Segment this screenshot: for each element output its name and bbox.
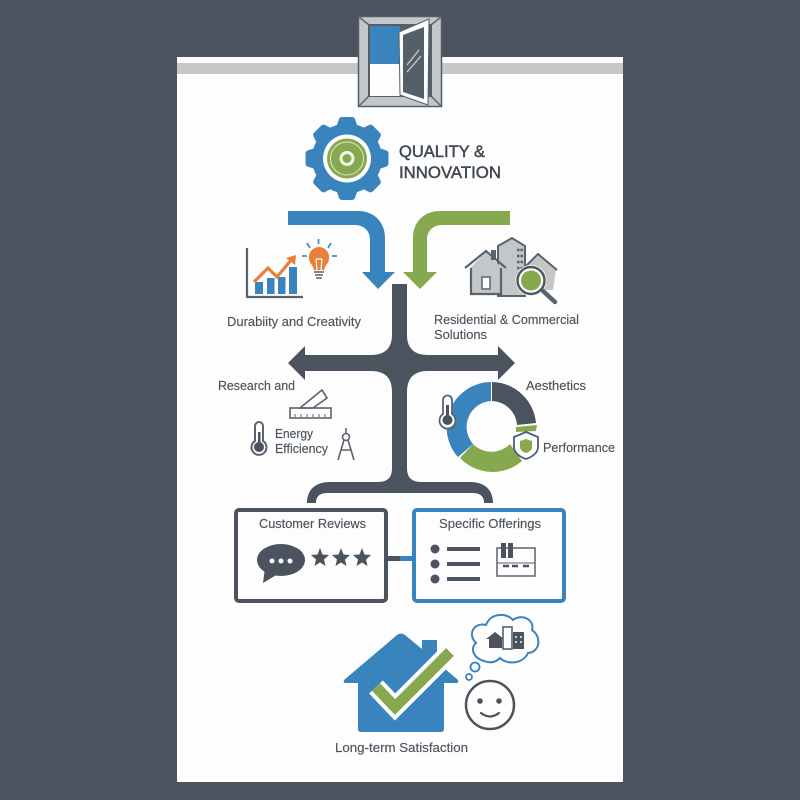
label: durability: Durabiity and Creativity — [227, 315, 362, 329]
arrow: blue down — [288, 211, 395, 289]
icon: list — [430, 544, 480, 584]
icon: thermometer right — [440, 396, 455, 429]
label: residential and commercial: Residential & Commercial — [434, 313, 579, 327]
icon: thermometer left — [252, 422, 266, 455]
label: research and: Research and — [218, 379, 295, 393]
icon: growth chart — [247, 248, 303, 297]
icon: thought bubble — [466, 615, 538, 680]
icon: open window — [358, 16, 442, 106]
label: energy efficiency: Efficiency — [275, 442, 329, 456]
label: aesthetics: Aesthetics — [526, 379, 586, 393]
label: long-term satisfaction: Long-term Satisfaction — [335, 741, 468, 755]
label: energy efficiency — [275, 427, 329, 456]
icon: house with check — [344, 634, 458, 732]
label: specific offerings: Specific Offerings — [439, 517, 541, 531]
label: customer reviews: Customer Reviews — [259, 517, 366, 531]
icon: houses and magnifier — [465, 238, 557, 302]
arrow: green down — [403, 211, 510, 289]
icon: speech bubble — [257, 544, 305, 583]
icon: light bulb — [302, 239, 337, 278]
label: performance: Performance — [543, 441, 615, 455]
icon: drafting compass — [338, 428, 354, 460]
title: QUALITY & — [399, 143, 485, 161]
title: INNOVATION — [399, 164, 501, 182]
panel: customer reviews — [236, 510, 386, 601]
label: residential and commercial: Solutions — [434, 328, 487, 342]
chart: donut — [447, 382, 537, 472]
panel: paper sheet — [177, 57, 623, 782]
icon: smiley face — [466, 681, 514, 729]
icon: gear — [306, 117, 388, 200]
icon: shield — [514, 432, 538, 459]
connector between boxes — [388, 556, 412, 561]
arrow: dark trunk with left and right branches — [288, 284, 515, 503]
label: energy efficiency: Energy — [275, 427, 314, 441]
title — [399, 143, 501, 182]
icon: ruler and set square — [290, 390, 331, 418]
label: residential and commercial — [434, 313, 579, 342]
panel: specific offerings — [414, 510, 564, 601]
icon: factory card — [497, 543, 535, 576]
icon: three stars — [311, 548, 371, 566]
